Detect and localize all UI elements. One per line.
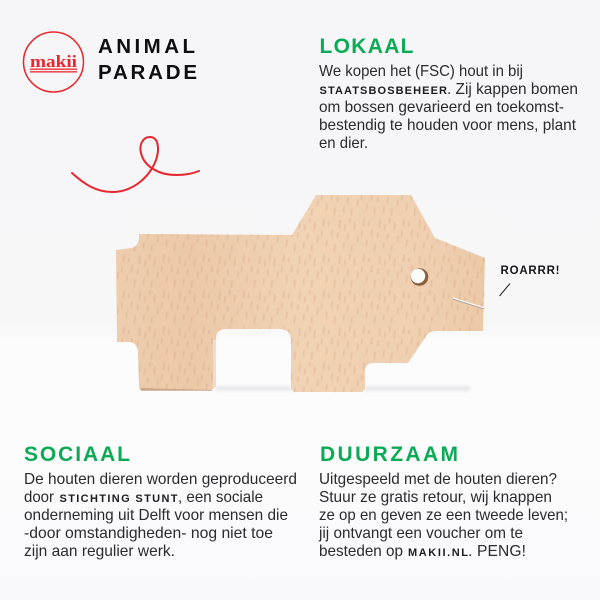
toy body <box>116 195 485 392</box>
wooden animal toy <box>116 195 485 392</box>
heading and text: Lokaal: en dier. <box>319 135 368 152</box>
heading and text: Duurzaam: ze op en geven ze een tweede leven; <box>319 507 568 524</box>
heading and text: Sociaal: , een sociale <box>178 489 263 506</box>
heading and text: Duurzaam: Stuur ze gratis retour, wij knappen <box>319 489 552 506</box>
heading and text: Sociaal: door <box>24 489 54 506</box>
heading and text: Duurzaam: DUURZAAM <box>320 443 458 466</box>
mouth slit <box>453 298 485 308</box>
heading and text: Sociaal: SOCIAAL <box>24 443 130 466</box>
heading and text: Lokaal: om bossen gevarieerd en toekomst- <box>319 99 564 116</box>
heading and text: Sociaal <box>24 443 297 560</box>
heading and text: Duurzaam: . PENG! <box>468 543 526 560</box>
heading and text: Lokaal <box>319 35 578 152</box>
heading and text: Duurzaam <box>318 443 568 560</box>
heading and text: Lokaal: STAATSBOSBEHEER <box>320 85 447 97</box>
speech label: Roarrr: ROARRR! <box>500 265 560 277</box>
wood grain <box>116 195 485 392</box>
heading and text: Lokaal: LOKAAL <box>320 35 414 58</box>
heading and text: Sociaal: zijn aan regulier werk. <box>24 543 175 560</box>
heading and text: Duurzaam: besteden op <box>319 543 403 560</box>
icon: red looping line <box>72 137 199 192</box>
title: Animal Parade: PARADE <box>98 61 197 84</box>
heading and text: Lokaal: We kopen het (FSC) hout in bij <box>319 63 523 80</box>
heading and text: Sociaal: onderneming uit Delft voor mensen die <box>24 507 288 524</box>
foot bottom edge <box>139 388 212 391</box>
heading and text: Lokaal: . Zij kappen bomen <box>447 81 578 98</box>
floor shadow <box>216 386 470 391</box>
heading and text: Duurzaam: MAKII.NL <box>408 547 468 559</box>
title: Animal Parade <box>98 35 197 84</box>
heading and text: Sociaal: -door omstandigheden- nog niet toe <box>24 525 273 542</box>
heading and text: Duurzaam: Uitgespeeld met de houten dieren? <box>319 471 557 488</box>
logo: makii badge <box>24 32 84 92</box>
heading and text: Duurzaam: jij ontvangt een voucher om te <box>318 525 523 542</box>
foot side edge <box>213 340 216 389</box>
title: Animal Parade: ANIMAL <box>98 35 195 58</box>
speech label: Roarrr <box>500 265 560 296</box>
eye hole <box>411 268 428 286</box>
heading and text: Lokaal: bestendig te houden voor mens, plant <box>319 117 577 134</box>
heading and text: Sociaal: STICHTING STUNT <box>60 493 178 505</box>
logo: makii badge: makii <box>30 52 77 71</box>
heading and text: Sociaal: De houten dieren worden geproduceerd <box>24 471 297 488</box>
